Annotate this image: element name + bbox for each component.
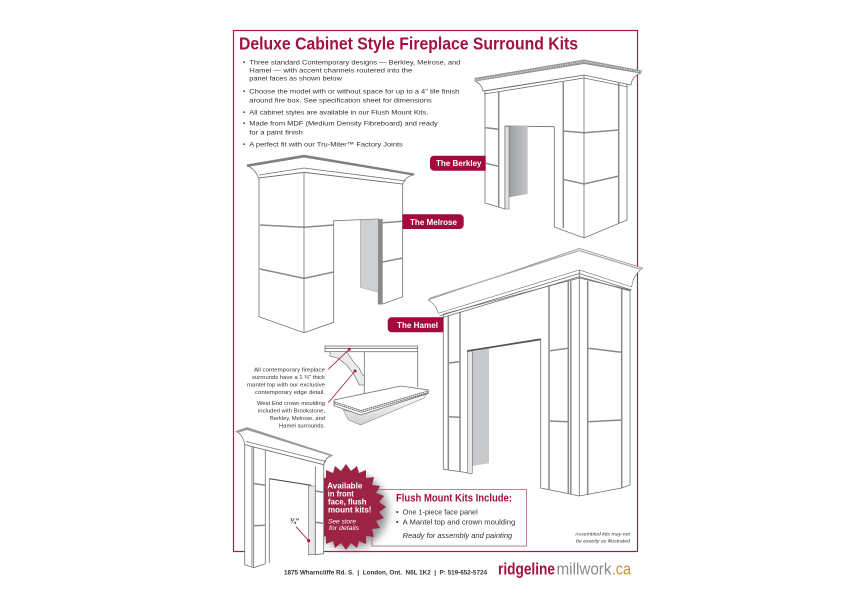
footer logo: ridgeline: [498, 560, 555, 578]
label: The Berkley: The Berkley: [436, 159, 482, 168]
feature bullet list: Hamel — with accent channels routered into the: [249, 68, 413, 74]
callout: mantel top note: mantel top with our exclusive: [247, 382, 325, 388]
starburst badge text: [327, 482, 372, 532]
starburst badge background: [306, 464, 386, 550]
feature bullet list: A perfect fit with our Tru-Miter™ Factory Joints: [249, 142, 404, 149]
panel: flush mount kits include: •: [396, 508, 399, 516]
starburst shadow: [312, 473, 388, 549]
disclaimer note: be exactly as illustrated: [576, 538, 630, 544]
feature bullet list: Made from MDF (Medium Density Fibreboard) and ready: [249, 121, 439, 128]
pointer lines to moulding: [328, 348, 356, 403]
label: The Berkley: [430, 156, 486, 171]
callout: crown moulding note: West End crown moulding: [257, 401, 325, 407]
starburst badge text: for details: [329, 526, 359, 532]
panel: flush mount kits include: A Mantel top and crown moulding: [403, 518, 515, 527]
feature bullet list: •: [243, 89, 246, 96]
starburst badge text: Available: [327, 482, 363, 490]
callout: crown moulding note: Berkley, Melrose, and: [270, 416, 325, 422]
feature bullet list: around fire box. See specification sheet for dimensions: [249, 98, 433, 104]
footer logo: .ca: [612, 560, 631, 578]
illustration: mantel shelf detail: [334, 386, 428, 425]
callout: mantel top note: contemporary edge detail.: [255, 390, 325, 396]
feature bullet list: panel faces as shown below: [249, 76, 342, 83]
panel: flush mount kits include: •: [396, 518, 399, 527]
feature bullet list: •: [243, 121, 246, 128]
panel: flush mount kits include: Flush Mount Kits Include:: [396, 492, 512, 504]
footer contact line: 1875 Wharncliffe Rd. S. | London, Ont. N6L 1K2 | P: 519-652-5724: [284, 570, 487, 576]
label: The Melrose: [402, 214, 464, 229]
starburst badge text: See store: [328, 520, 357, 526]
starburst badge text: mount kits!: [328, 506, 372, 514]
page frame: [234, 30, 638, 552]
callout: crown moulding note: [257, 401, 325, 430]
feature bullet list: •: [243, 59, 246, 66]
callout: mantel top note: [247, 368, 325, 396]
disclaimer note: Assembled kits may not: [574, 532, 631, 538]
panel: flush mount kits include: Ready for assembly and painting: [403, 531, 512, 540]
disclaimer note: [574, 532, 631, 544]
starburst badge text: in front: [328, 490, 354, 498]
label: The Melrose: The Melrose: [410, 218, 458, 227]
flush mount dimension note: [290, 518, 310, 542]
illustration: The Berkley surround: [474, 60, 642, 238]
illustration: The Melrose surround: [247, 155, 414, 333]
feature bullet list: All cabinet styles are available in our Flush Mount Kits.: [249, 110, 428, 117]
panel: flush mount kits include: One 1-piece face panel: [403, 508, 478, 516]
illustration: crown moulding cross-section: [325, 346, 418, 394]
illustration: The Hamel surround: [428, 248, 643, 496]
label: The Hamel: The Hamel: [397, 321, 438, 330]
feature bullet list: •: [243, 110, 246, 117]
callout: crown moulding note: Hamel surrounds.: [279, 424, 325, 430]
footer logo: [498, 560, 631, 578]
callout: crown moulding note: included with Brookstone,: [258, 408, 325, 414]
label: The Hamel: [388, 317, 443, 332]
callout: mantel top note: surrounds have a 1 ¾" thick: [252, 375, 325, 381]
footer logo: millwork: [556, 560, 612, 578]
feature bullet list: Three standard Contemporary designs — Berkley, Melrose, and: [249, 59, 461, 66]
title: Deluxe Cabinet Style Fireplace Surround Kits: [239, 34, 578, 54]
starburst badge text: face, flush: [328, 498, 366, 506]
feature bullet list: [243, 59, 461, 149]
callout: mantel top note: All contemporary fireplace: [254, 368, 325, 374]
flush mount dimension note: ¾": [290, 518, 299, 526]
feature bullet list: •: [243, 142, 246, 149]
panel: flush mount kits include: [372, 490, 526, 546]
feature bullet list: for a paint finish: [249, 129, 303, 136]
feature bullet list: Choose the model with or without space for up to a 4" tile finish: [249, 89, 460, 96]
illustration: flush mount surround: [236, 428, 332, 568]
